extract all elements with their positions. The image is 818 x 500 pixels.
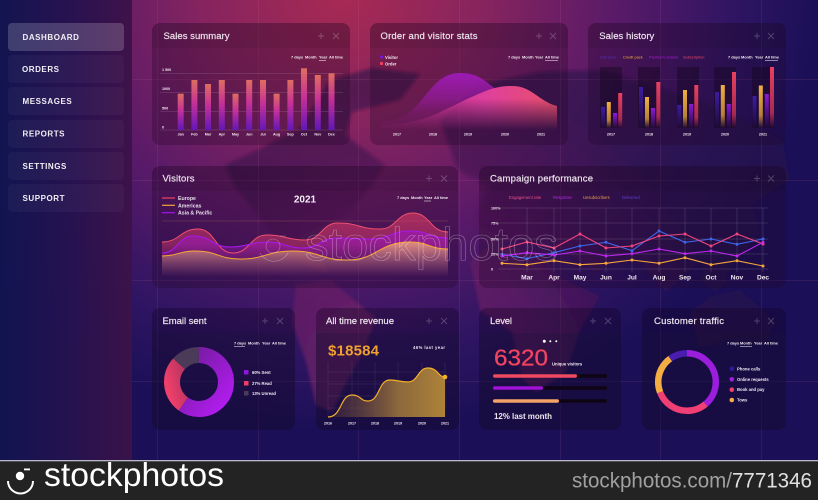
nav item: orders: ORDERS <box>22 65 60 74</box>
range tabs: 7 days <box>727 340 739 346</box>
chart legend: Americas <box>178 203 201 209</box>
range tabs: Year <box>535 54 544 60</box>
bar chart: Jul <box>260 132 266 136</box>
heading: customer traffic: Customer traffic <box>654 316 724 327</box>
nav item: settings: SETTINGS <box>22 162 67 171</box>
line chart: Dec <box>757 274 769 281</box>
nav item: settings <box>8 152 124 180</box>
area chart: 2017 <box>393 132 401 136</box>
pagination dots <box>543 340 557 343</box>
range tabs: 7 days <box>728 54 740 60</box>
range tabs: Year <box>754 340 763 346</box>
range tabs: 7 days <box>508 54 520 60</box>
panel: sales history <box>588 23 786 145</box>
window controls <box>426 318 447 324</box>
range tabs: 7 days <box>291 54 303 60</box>
monthly change: 12% last month <box>494 412 552 421</box>
nav item: messages: MESSAGES <box>22 97 72 106</box>
area chart: 2018 <box>429 132 437 136</box>
area chart <box>324 362 449 426</box>
line chart: Mar <box>521 274 533 281</box>
line chart: Oct <box>706 274 717 281</box>
heading: sales summary: Sales summary <box>164 31 230 42</box>
chart legend <box>509 195 640 200</box>
progress bars <box>493 374 607 403</box>
heading: campaign performance: Campaign performance <box>490 174 593 184</box>
line chart: Aug <box>653 274 665 281</box>
area chart <box>380 73 557 136</box>
window controls <box>536 33 556 39</box>
panel: all time revenue <box>316 308 459 430</box>
nav item: dashboard: DASHBOARD <box>22 33 79 42</box>
grouped bar chart <box>600 67 774 136</box>
bar chart: Nov <box>314 132 322 136</box>
range tabs <box>291 54 344 60</box>
level value: 6320 <box>494 344 548 370</box>
bar chart: Jan <box>178 132 185 136</box>
range tabs: 7 days <box>397 195 409 200</box>
chart legend <box>162 196 212 217</box>
bar chart: Aug <box>273 132 280 136</box>
bar chart <box>160 68 343 136</box>
area chart: 2016 <box>324 422 332 426</box>
line chart: Nov <box>731 274 744 281</box>
area chart: 2020 <box>418 422 426 426</box>
window controls <box>318 33 339 39</box>
chart legend <box>380 55 398 66</box>
range tabs <box>728 54 780 60</box>
line chart: Sep <box>679 274 691 281</box>
range tabs <box>727 340 779 346</box>
range tabs <box>508 54 560 60</box>
area chart: 2021 <box>537 132 545 136</box>
grouped bar chart: 2017 <box>607 132 615 136</box>
bar chart: Feb <box>191 132 198 136</box>
panel: visitors <box>152 166 458 288</box>
range tabs: Month <box>741 54 753 60</box>
range tabs <box>234 340 287 346</box>
bar chart: 1 500 <box>162 68 171 72</box>
revenue value: $18584 <box>328 342 380 360</box>
watermark: stockphotos <box>305 218 558 270</box>
chart legend: Engagement rate <box>509 195 542 200</box>
footer logo icon <box>8 468 33 493</box>
chart legend: Europe <box>178 196 196 202</box>
bar chart: Oct <box>301 132 308 136</box>
line chart: 0 <box>491 268 493 272</box>
grouped bar chart: 2021 <box>759 132 767 136</box>
world map <box>225 68 790 412</box>
nav item: orders <box>8 55 124 83</box>
ring legend: Book and pay <box>737 387 765 392</box>
window controls <box>262 318 283 324</box>
range tabs: Year <box>755 54 764 60</box>
heading: visitors: Visitors <box>162 174 195 184</box>
chart legend: Response <box>553 195 573 200</box>
window controls <box>754 176 774 182</box>
range tabs: Year <box>262 340 271 346</box>
grouped bar chart: 2019 <box>683 132 691 136</box>
area chart: 2017 <box>348 422 356 426</box>
range tabs: Month <box>248 340 260 346</box>
line chart: May <box>574 274 587 281</box>
heading: all time revenue: All time revenue <box>326 316 394 327</box>
panel: sales summary <box>152 23 350 145</box>
panel: customer traffic <box>642 308 786 430</box>
panel: order and visitor stats <box>370 23 568 145</box>
ring legend: Tows <box>737 398 748 402</box>
area chart: 2019 <box>394 422 402 426</box>
heading: sales history: Sales history <box>599 31 655 42</box>
window controls <box>754 318 774 324</box>
bar chart: Mar <box>205 132 212 136</box>
value caption: Unique visitors <box>552 362 583 366</box>
range tabs: All time <box>764 340 779 346</box>
range tabs: All time <box>329 54 344 60</box>
window controls <box>590 318 611 324</box>
range tabs: Year <box>319 54 328 60</box>
grouped bar chart: 2020 <box>721 132 729 136</box>
chart legend: Asia & Pacific <box>178 211 212 217</box>
bar chart: 0 <box>162 126 164 130</box>
year label: 2021 <box>294 194 317 206</box>
ring legend <box>730 366 769 402</box>
range tabs <box>397 195 449 201</box>
chart legend: Order <box>385 62 397 66</box>
sidebar <box>0 0 132 460</box>
line chart: 50% <box>491 238 499 242</box>
ring legend: Phone calls <box>737 366 761 371</box>
donut legend: 27% Read <box>252 381 272 386</box>
range tabs: Month <box>522 54 534 60</box>
bar chart: 1000 <box>162 87 170 91</box>
panel: level <box>479 308 621 430</box>
nav item: support: SUPPORT <box>22 194 65 203</box>
chart legend <box>600 54 704 60</box>
area chart <box>162 213 448 276</box>
range tabs: Month <box>740 340 752 346</box>
donut legend: 60% Sent <box>252 370 271 375</box>
donut legend <box>244 370 276 396</box>
range tabs: Year <box>424 195 433 200</box>
window controls <box>754 33 774 39</box>
footer logo wordmark: stockphotos <box>44 456 224 493</box>
bar chart: Sep <box>287 132 295 136</box>
window controls <box>426 176 447 182</box>
donut legend: 13% Unread <box>252 391 276 396</box>
nav item: support <box>8 184 124 212</box>
panel: email sent <box>152 308 295 430</box>
area chart: 2018 <box>371 422 379 426</box>
donut chart <box>172 355 226 409</box>
grouped bar chart: 2018 <box>645 132 653 136</box>
chart legend: Unsubscribers <box>583 195 610 200</box>
footer image id: stockphotos.com/7771346 <box>572 470 812 492</box>
nav item: reports: REPORTS <box>22 129 65 138</box>
area chart: 2020 <box>501 132 509 136</box>
nav item: dashboard <box>8 23 124 51</box>
line chart: 100% <box>491 206 501 210</box>
line chart: 25% <box>491 252 499 256</box>
year change: 46% last year <box>413 345 445 350</box>
range tabs: All time <box>765 54 780 60</box>
panel: campaign performance <box>479 166 786 288</box>
area chart: 2019 <box>464 132 472 136</box>
chart legend: Subscription <box>683 54 704 60</box>
heading: email sent: Email sent <box>162 316 207 327</box>
bar chart: Apr <box>219 132 226 136</box>
range tabs: 7 days <box>234 340 246 346</box>
heading: level: Level <box>490 316 512 327</box>
chart legend: Delivered <box>622 195 640 200</box>
bar chart: Jun <box>246 132 253 136</box>
ring chart <box>658 353 716 411</box>
range tabs: All time <box>545 54 560 60</box>
bar chart: 500 <box>162 106 168 110</box>
range tabs: Month <box>411 195 423 200</box>
chart legend: Premium version <box>649 54 678 60</box>
bar chart: May <box>232 132 240 136</box>
heading: order and visitor stats: Order and visitor stats <box>380 31 478 42</box>
nav item: messages <box>8 87 124 115</box>
range tabs: All time <box>272 340 287 346</box>
area chart: 2021 <box>441 422 449 426</box>
ring legend: Online requests <box>737 377 769 382</box>
chart legend: Unit price <box>600 54 616 60</box>
range tabs: Month <box>305 54 317 60</box>
line chart: Jul <box>627 274 637 281</box>
chart legend: Visitor <box>385 55 398 60</box>
line chart: 75% <box>491 222 499 226</box>
bar chart: Dec <box>328 132 335 136</box>
line chart: Jun <box>600 274 612 281</box>
chart legend: Credit pack <box>623 54 643 60</box>
range tabs: All time <box>434 195 449 200</box>
footer bar <box>0 456 818 500</box>
line chart <box>491 206 769 281</box>
nav item: reports <box>8 120 124 148</box>
line chart: Apr <box>548 274 560 281</box>
